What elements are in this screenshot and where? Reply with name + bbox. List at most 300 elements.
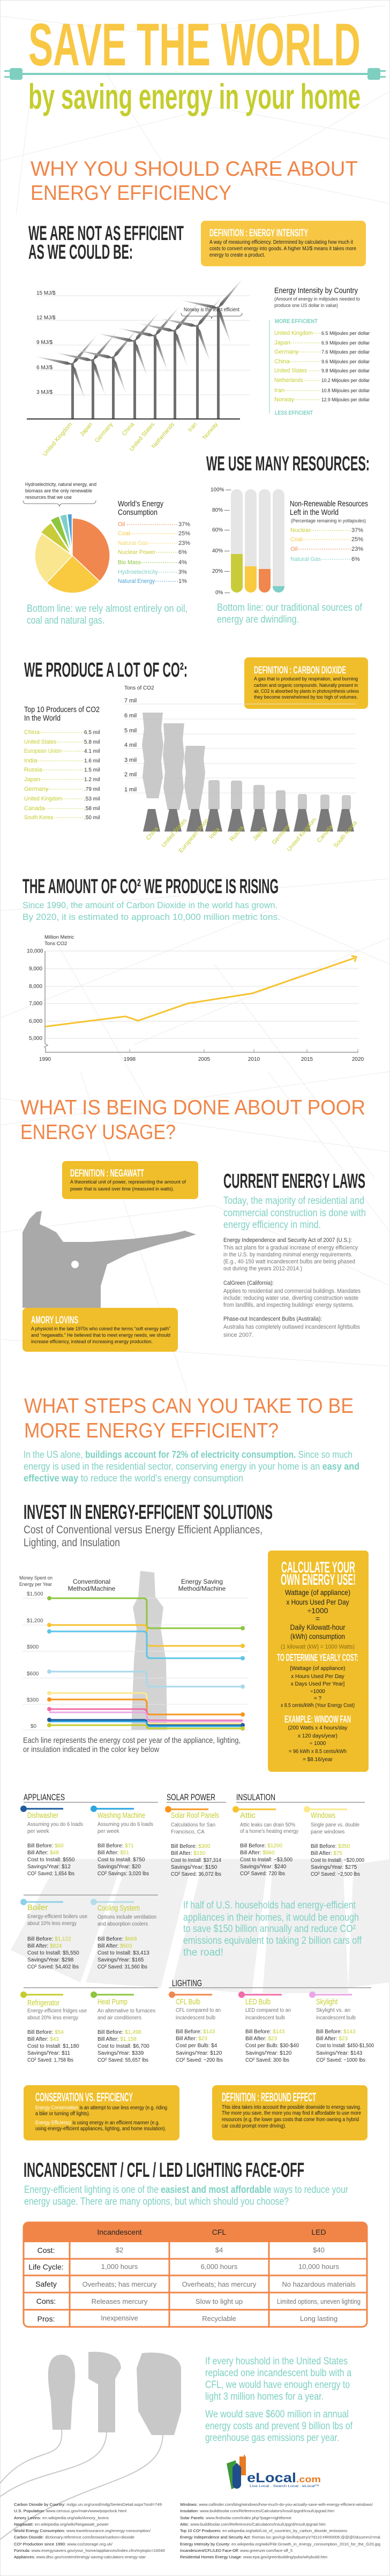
- callout: half of households: to save $150 billion annually and reduce CO²: [183, 1923, 356, 1935]
- heading: not as efficient: WE ARE NOT AS EFFICIENT: [28, 222, 184, 245]
- table: lighting comparison: $40: [313, 2246, 325, 2254]
- text: energy laws list: [223, 1237, 361, 1338]
- text: energy laws list: since 2007.: [223, 1332, 253, 1338]
- box: conservation vs efficiency: using energy-efficient appliances, lighting, and home insulation).: [35, 2126, 166, 2132]
- text: energy laws list: include: reducing water use, diverting construction waste: [223, 1295, 358, 1301]
- item details: row 3: Bill Before: $54: [27, 2030, 64, 2035]
- box: calculate energy use: [Wattage (of appliance): [290, 1666, 346, 1672]
- callout: half of households: [183, 1900, 362, 1958]
- legend: energy intensity by country: Energy Intensity by Country: [274, 286, 358, 295]
- sources: Appliances: www.dtsc.gov/content/energy-saving-calculators-energy-star: [14, 2556, 146, 2559]
- box: amory lovins: increase efficiency, instead of increasing energy production.: [31, 1339, 153, 1345]
- legend: non-renewable: 37%: [351, 527, 363, 534]
- legend: world energy consumption: 37%: [178, 521, 190, 528]
- section heading: what steps: [24, 1395, 354, 1442]
- legend: energy intensity by country: [269, 286, 370, 416]
- item details: row 1: Savings/Year: $275: [311, 1864, 357, 1870]
- chart: wind turbines energy intensity: [27, 278, 250, 458]
- callout: half of households: If half of U.S. households had energy-efficient: [183, 1900, 356, 1911]
- definition box: carbon dioxide: [244, 657, 368, 709]
- box: conservation vs efficiency: Energy Efficiency is using energy in an efficient manner (e.g.: [35, 2120, 160, 2126]
- callout: norway least efficient: [181, 307, 242, 319]
- list: top 10 producers: 5.8 mil: [84, 739, 100, 745]
- table: lighting comparison: 6,000 hours: [201, 2263, 238, 2271]
- item details: row 1: Cost to Install: ~$3,500: [240, 1857, 292, 1863]
- legend: world energy consumption: 3%: [178, 569, 187, 575]
- item details: row 3: Energy-efficient fridges use: [27, 2008, 87, 2014]
- box: amory lovins: A physicist in the late 1970s who coined the terms “soft energy path”: [31, 1326, 170, 1332]
- item details: row 1: per week: [98, 1829, 120, 1834]
- text: cfl replacement: We would save $600 million in annual: [205, 2409, 349, 2420]
- item details: row 2 boiler cooling: and absorption coolers: [98, 1921, 148, 1927]
- list: top 10 producers: .50 mil: [84, 815, 100, 821]
- sources: Top 10 CO² Producers: en.wikipedia.org/wiki/List_of_countries_by_carbon_dioxide_emissions: [180, 2529, 348, 2533]
- item details: row 1: Calculations for San: [171, 1822, 215, 1828]
- text: energy laws list: Energy Independence and Security Act of 2007 (U.S.):: [223, 1237, 352, 1244]
- chart: smokestacks co2: 6 mil: [124, 713, 137, 719]
- box: calculate energy use: [268, 1551, 369, 1772]
- list: top 10 producers: United States: [24, 739, 56, 745]
- line chart: co2 1990-2020: 5,000: [29, 1036, 42, 1042]
- item details: row 3: Skylight vs. an: [316, 2008, 350, 2013]
- legend: energy intensity by country: 6.5 Miljoules per dollar: [321, 331, 370, 336]
- item details: row 1: Bill After: $51: [98, 1850, 129, 1856]
- definition box: carbon dioxide: they become overwhelmed by too high of volumes.: [254, 694, 358, 700]
- item details: row 1: pane windows: [311, 1829, 344, 1835]
- legend: energy intensity by country: Germany: [274, 349, 299, 355]
- chart: wind turbines energy intensity: Japan: [79, 421, 94, 438]
- pie chart: world energy consumption: [35, 514, 110, 593]
- chart: smokestacks co2: Canada: [316, 823, 334, 844]
- table: lighting comparison: 10,000 hours: [298, 2263, 339, 2271]
- item details: row 3: Bill Before: $143: [176, 2029, 215, 2035]
- sources: Insulation: www.builditsolar.com/References/Calculators/InsulUpgrd/InsulUpgrad.htm: [180, 2510, 334, 2513]
- chart: smokestacks co2: 1 mil: [124, 787, 137, 793]
- chart: money spent lines: [19, 1571, 249, 1731]
- text: cfl replacement: If every houshold in the United States: [205, 2356, 348, 2367]
- chart: wind turbines energy intensity: Iran: [187, 421, 198, 433]
- chart: smokestacks co2: China: [145, 825, 160, 842]
- list: top 10 producers: .79 mil: [84, 787, 100, 792]
- item details: row 1: Savings/Year: $12: [27, 1864, 71, 1870]
- definition box: negawatt: [62, 1161, 198, 1199]
- item details: row 3: incandescent bulb: [176, 2015, 215, 2021]
- text: buildings 72%: [24, 1449, 359, 1484]
- bottom line text right: Bottom line: our traditional sources of: [217, 602, 363, 613]
- definition box: negawatt: A theoretical unit of power, representing the amount of: [70, 1179, 186, 1185]
- box: rebound effect: resources (e.g. the lower gas costs that come from owning a hybrid: [222, 2117, 359, 2123]
- table: lighting comparison: Pros:: [38, 2315, 55, 2323]
- table: lighting comparison: Releases mercury: [92, 2297, 148, 2305]
- item details: row 1: CO² Saved: 720 lbs: [240, 1871, 285, 1877]
- bar chart: non-renewable resources: 100% —: [211, 487, 231, 493]
- box: calculate energy use: x Hours Used Per Day: [291, 1674, 344, 1680]
- text: cfl replacement: energy costs and prevent 9 billion lbs of: [205, 2421, 353, 2432]
- definition box: negawatt: power that is saved over time (measured in watts).: [70, 1186, 174, 1192]
- item details: row 1: Bill Before: $1200: [240, 1843, 282, 1849]
- item details: row 3: Bill After: $23: [316, 2036, 348, 2042]
- chart: money spent lines: Method/Machine: [68, 1585, 116, 1592]
- item details: row 2 boiler cooling: Cost to Install: $3,413: [98, 1950, 149, 1956]
- item details: row 1: Bill Before: $300: [171, 1844, 211, 1849]
- definition box: energy intensity: costs to convert energy into goods. A higher MJ/$ means it takes more: [209, 246, 356, 252]
- sources: Energy Intensity by County: en.wikipedia.org/wiki/File:Growth_in_energy_consumption_2010_for_the_G20.jpg: [180, 2543, 380, 2547]
- box: calculate energy use: = 96 kWh x 8.5 cents/kWh: [289, 1749, 347, 1755]
- legend: world energy consumption: 23%: [178, 540, 190, 546]
- item details: row 1: per week: [27, 1829, 50, 1834]
- legend: energy intensity by country: LESS EFFICIENT: [275, 410, 313, 416]
- box: amory lovins: and “negawatts.” He believed that to meet energy needs, we should: [31, 1332, 170, 1338]
- item details: row 2 boiler cooling: CO² Saved: 54,402 lbs: [27, 1964, 79, 1970]
- list: top 10 producers: Germany: [24, 786, 49, 792]
- text: energy laws list: from landfills, and inspecting buildings’ energy systems.: [223, 1302, 354, 1308]
- list: top 10 producers: China: [24, 729, 40, 736]
- chart: wind turbines energy intensity: China: [121, 421, 136, 437]
- table: lighting comparison: 1,000 hours: [101, 2263, 138, 2271]
- legend: world energy consumption: Natural Energy: [118, 578, 155, 585]
- table: lighting comparison: Life Cycle:: [28, 2263, 64, 2271]
- box: calculate energy use: ÷1000: [308, 1606, 328, 1615]
- chart: smokestacks co2: Tons of CO2: [124, 685, 154, 691]
- text: energy laws intro: [223, 1195, 366, 1231]
- box: rebound effect: This idea takes into account the possible downside to energy saving.: [222, 2105, 361, 2110]
- box: amory lovins: [22, 1308, 178, 1352]
- item details: row 1: Attic leaks can drain 50%: [240, 1822, 295, 1828]
- table: lighting comparison: $2: [116, 2246, 123, 2254]
- legend: world energy consumption: World’s Energy: [118, 499, 163, 508]
- section headers: appliances solar insulation: LIGHTING: [172, 1978, 202, 1988]
- text: cfl replacement: CFL, we would have enough energy to: [205, 2379, 350, 2391]
- sources: Residential Homes Energy Usage: www.epa.gov/greenbuilding/pubs/whybuild.htm: [180, 2556, 327, 2559]
- item details: row 1: Dishwasher: [27, 1811, 58, 1820]
- box: calculate energy use: =: [316, 1614, 320, 1623]
- legend: energy intensity by country: produce one US dollar in value): [274, 303, 338, 309]
- list: top 10 producers: Canada: [24, 805, 45, 812]
- sources: U.S. Population: www.census.gov/main/www/popclock.html: [14, 2510, 126, 2513]
- icon: plug cord: [4, 68, 386, 80]
- chart: money spent lines: Money Spent on: [19, 1575, 52, 1581]
- item details: row 1: Bill After: $150: [171, 1851, 206, 1856]
- item details: row 3: Savings/Year: $120: [245, 2050, 292, 2056]
- legend: energy intensity by country: 9.6 Miljoules per dollar: [321, 359, 370, 365]
- legend: world energy consumption: 1%: [178, 578, 187, 585]
- subtitle: cost comparison: Cost of Conventional versus Energy Efficient Appliances,: [24, 1524, 262, 1536]
- line chart: co2 1990-2020: Tons CO2: [44, 941, 67, 947]
- chart: wind turbines energy intensity: 6 MJ/$: [36, 365, 52, 371]
- chart: smokestacks co2: Germany: [271, 823, 291, 846]
- item details: row 1: Cost to Install: $550: [27, 1857, 75, 1863]
- chart: smokestacks co2: [124, 685, 359, 854]
- chart: wind turbines energy intensity: 3 MJ/$: [36, 390, 52, 395]
- item details: row 3: Bill After: $43: [27, 2036, 59, 2042]
- chart: smokestacks co2: 4 mil: [124, 742, 137, 748]
- item details: row 2 boiler cooling: Savings/Year: $298: [27, 1957, 74, 1963]
- item details: row 3: Savings/Year: $11: [27, 2050, 70, 2056]
- item details: row 3: LED Bulb: [245, 1997, 271, 2006]
- bar chart: non-renewable resources: [211, 487, 284, 596]
- heading: not as efficient: [28, 222, 184, 264]
- definition box: carbon dioxide: carbon and organic compounds. Naturally present in: [254, 683, 358, 688]
- table: lighting comparison: Long lasting: [300, 2315, 338, 2323]
- bar chart: non-renewable resources: 60% —: [212, 527, 230, 533]
- item details: row 1: Solar Roof Panels: [171, 1811, 219, 1820]
- item details: row 3: Cost to Install: $6,700: [98, 2043, 149, 2049]
- bottom line text left: [27, 603, 188, 626]
- legend: energy intensity by country: (Amount of energy in milijoules needed to: [274, 296, 360, 302]
- legend: world energy consumption: [118, 499, 190, 585]
- item details: row 2 boiler cooling: Cooling System: [98, 1904, 140, 1913]
- chart: money spent lines: $1,200: [27, 1618, 43, 1624]
- item details: row 2 boiler cooling: Bill After: $503: [98, 1943, 132, 1949]
- box: calculate energy use: x 120 days/year): [298, 1733, 338, 1739]
- legend: world energy consumption: Natural Gas: [118, 540, 148, 546]
- line chart: co2 1990-2020: 6,000: [29, 1019, 42, 1024]
- sources: Amory Lovins: en.wikipedia.org/wiki/Amory_lovins: [14, 2517, 109, 2520]
- item details: row 1: Washing Machine: [98, 1811, 145, 1820]
- section heading: what steps: WHAT STEPS CAN YOU TAKE TO BE: [24, 1395, 354, 1418]
- item details: row 1: Cost to Install: $37,314: [171, 1858, 221, 1863]
- text: energy laws list: Phase-out Incandescent Bulbs (Australia):: [223, 1316, 322, 1322]
- text: energy laws list: (E.g., 40-150 watt incandescent bulbs are being phased: [223, 1259, 355, 1265]
- table: lighting comparison: Limited options, uneven lighting: [277, 2297, 361, 2305]
- box: rebound effect: [212, 2085, 368, 2140]
- legend: non-renewable: Nuclear: [290, 527, 311, 534]
- text: energy laws list: Applies to residential and commercial buildings. Mandates: [223, 1288, 361, 1294]
- definition box: energy intensity: A way of measuring efficiency. Determined by calculating how much it: [209, 239, 353, 245]
- chart: smokestacks co2: United States: [160, 817, 188, 849]
- legend: non-renewable: Non-Renewable Resources: [290, 499, 368, 508]
- sources: CO² Production since 1990: www.co2storage.org.uk/: [14, 2543, 112, 2547]
- legend: energy intensity by country: Iran: [274, 387, 284, 394]
- item details: row 1: Savings/Year: $150: [171, 1864, 218, 1870]
- item details: row 3: CFL Bulb: [176, 1997, 200, 2006]
- box: calculate energy use: = $8.16/year: [303, 1757, 333, 1763]
- box: calculate energy use: ÷1000: [310, 1689, 325, 1695]
- box: calculate energy use: x Days Used Per Year]: [291, 1681, 345, 1687]
- chart: smokestacks co2: United Kingdom: [286, 817, 318, 853]
- item details: row 2 boiler cooling: Boiler: [27, 1903, 48, 1912]
- heading: not as efficient: AS WE COULD BE:: [28, 241, 133, 264]
- sources: Energy Independence and Security Act: thomas.loc.gov/cgi-bin/bdquery/z?d110:HR00006:@@@D&summ2=m&: [180, 2536, 380, 2540]
- item details: row 1: Attic: [240, 1811, 256, 1820]
- text: energy laws list: in the U.S. by mandating minimal energy requirements.: [223, 1252, 352, 1258]
- chart: smokestacks co2: 2 mil: [124, 772, 137, 778]
- sources: Negawatt: en.wikipedia.org/wiki/Negawatt_power: [14, 2523, 109, 2527]
- bar chart: non-renewable resources: 80% —: [212, 507, 230, 513]
- list: top 10 producers: India: [24, 758, 38, 764]
- section headers: appliances solar insulation: SOLAR POWER: [167, 1792, 215, 1802]
- text: cfl replacement: [205, 2356, 353, 2444]
- item details: row 3: Bill Before: $143: [245, 2029, 285, 2035]
- item details: row 1: Francisco, CA: [171, 1829, 205, 1835]
- chart: money spent lines: Method/Machine: [178, 1585, 226, 1592]
- chart: wind turbines energy intensity: Germany: [94, 421, 115, 444]
- background: solar panels: [11, 1859, 390, 1993]
- section heading: why care: ENERGY EFFICIENCY: [31, 182, 231, 205]
- chart: smokestacks co2: 3 mil: [124, 757, 137, 763]
- sources: Carbon Dioxide by Country: mdgs.un.org/unsd/mdg/SeriesDetail.aspx?srid=749: [14, 2503, 162, 2507]
- box: conservation vs efficiency: [24, 2085, 179, 2140]
- item details: row 1: CO² Savings: 3,020 lbs: [98, 1871, 149, 1877]
- chart: wind turbines energy intensity: 15 MJ/$: [36, 290, 56, 296]
- legend: energy intensity by country: 7.6 Miljoules per dollar: [321, 349, 370, 355]
- chart: smokestacks co2: 5 mil: [124, 728, 137, 734]
- box: rebound effect: The more you save, the more you may find it affordable to use more: [222, 2110, 361, 2116]
- item details: row 3: Savings/Year: $339: [98, 2050, 144, 2056]
- text: each line represents: [23, 1736, 241, 1754]
- bottom line text right: energy are dwindling.: [217, 614, 299, 625]
- table: lighting comparison: Safety: [35, 2280, 57, 2288]
- chart: money spent lines: $300: [27, 1697, 39, 1703]
- item details: row 3: Cost per Bulb: $30-$40: [245, 2043, 299, 2049]
- line chart: co2 1990-2020: 1998: [124, 1057, 136, 1062]
- item details: row 3: LED compared to an: [245, 2008, 291, 2013]
- legend: world energy consumption: Oil: [118, 521, 125, 528]
- item details: row 3: Bill Before: $1,498: [98, 2030, 141, 2035]
- chart: money spent lines: $0: [31, 1724, 37, 1729]
- list: top 10 producers: South Korea: [24, 814, 54, 821]
- list: top 10 producers: 1.2 mil: [84, 777, 100, 783]
- legend: world energy consumption: 4%: [178, 559, 187, 566]
- legend: world energy consumption: Coal: [118, 530, 130, 537]
- text: buildings 72%: In the US alone, buildings account for 72% of electricity consumption. Since so much: [24, 1449, 352, 1460]
- item details: row 3: CO² Saved: 55,657 lbs: [98, 2057, 148, 2063]
- legend: energy intensity by country: United Kingdom: [274, 330, 313, 336]
- item icons: color keys: [21, 1807, 352, 1997]
- item details: row 1: CO² Saved: 1,654 lbs: [27, 1871, 74, 1877]
- legend: energy intensity by country: 6.9 Miljoules per dollar: [321, 340, 370, 346]
- sources: Formula: www.energysavers.gov/your_home/appliances/index.cfm/mytopic=10040: [14, 2549, 165, 2553]
- list: top 10 producers: Japan: [24, 776, 40, 783]
- bar chart: non-renewable resources: 20% —: [212, 568, 230, 574]
- item details: row 1: Assuming you do 6 loads: [27, 1822, 83, 1828]
- item details: row 1: Bill After: $48: [27, 1850, 59, 1856]
- item details: row 1: Cost to Install: ~$20,000: [311, 1858, 364, 1863]
- box: calculate energy use: = ?: [314, 1696, 322, 1702]
- subtitle: cost comparison: Lighting, and Insulation: [24, 1537, 120, 1549]
- callout: renewable: Hydroelectricity, natural energy, and: [25, 482, 96, 488]
- item details: row 2 boiler cooling: Energy-efficient boilers use: [27, 1914, 87, 1920]
- illustration: light bulbs: [0, 2352, 181, 2540]
- bar chart: non-renewable resources: 40% —: [212, 548, 230, 554]
- list: top 10 producers: Top 10 Producers of CO2: [24, 705, 100, 714]
- legend: non-renewable: [290, 499, 368, 563]
- list: top 10 producers: [24, 705, 100, 821]
- box: calculate energy use: (kWh) consumption: [290, 1632, 345, 1641]
- box: calculate energy use: Daily Kilowatt-hour: [290, 1623, 346, 1631]
- item details: row 3: Bill After: $1,158: [98, 2036, 137, 2042]
- bar chart: non-renewable resources: 0% —: [215, 590, 230, 596]
- list: top 10 producers: .53 mil: [84, 796, 100, 802]
- table: lighting comparison: Overheats; has mercury: [182, 2280, 257, 2288]
- table: lighting comparison: Incandescent: [97, 2228, 142, 2236]
- item details: row 3: incandescent bulb: [245, 2015, 285, 2021]
- table: lighting comparison: Inexpensive: [101, 2314, 138, 2322]
- line chart: co2 1990-2020: 9,000: [29, 966, 42, 972]
- chart: smokestacks co2: Japan: [252, 826, 267, 842]
- item details: row 1: Savings/Year: $20: [98, 1864, 141, 1870]
- line chart: co2 1990-2020: 7,000: [29, 1001, 42, 1007]
- item details: row 2 boiler cooling: about 10% less energy: [27, 1921, 77, 1927]
- line chart: co2 1990-2020: 10,000: [27, 948, 43, 954]
- chart: wind turbines energy intensity: United States: [129, 421, 156, 453]
- callout: half of households: the road!: [183, 1947, 223, 1958]
- text: buildings 72%: effective way to reduce the world's energy consumption: [24, 1473, 243, 1484]
- table: lighting comparison: LED: [311, 2228, 326, 2236]
- item details: row 1: Bill Before: $60: [27, 1843, 64, 1849]
- item details: row 3: An alternative to furnaces: [98, 2008, 155, 2014]
- item details: row 1: Savings/Year: $240: [240, 1864, 287, 1870]
- text: cfl replacement: light 3 million homes for a year.: [205, 2391, 324, 2402]
- legend: energy intensity by country: 10.8 Miljoules per dollar: [321, 388, 370, 394]
- line chart: co2 1990-2020: 2020: [352, 1057, 364, 1062]
- legend: non-renewable: Natural Gas: [290, 556, 321, 563]
- legend: world energy consumption: Nuclear Power: [118, 549, 155, 556]
- item details: row 3: Cost to Install: $1,180: [27, 2043, 79, 2049]
- text: cfl replacement: greenhouse gas emissions per year.: [205, 2432, 339, 2444]
- item details: row 1: Cost to Install: $750: [98, 1857, 145, 1863]
- text: co2 growth: Since 1990, the amount of Carbon Dioxide in the world has grown.: [22, 900, 278, 910]
- item details: row 3: CO² Saved: 1,758 lbs: [27, 2057, 73, 2063]
- definition box: carbon dioxide: A gas that is produced by respiration, and burning: [254, 676, 358, 682]
- text: energy laws list: Australia has completely outlawed incandescent lightbulbs: [223, 1324, 360, 1330]
- legend: non-renewable: 25%: [351, 536, 363, 543]
- subtitle: cost comparison: [24, 1524, 262, 1549]
- item details: row 2 boiler cooling: Cost to Install: $5,550: [27, 1950, 79, 1956]
- box: calculate energy use: ÷ 1000: [310, 1741, 326, 1747]
- chart: smokestacks co2: Russia: [229, 825, 245, 843]
- section heading: what is being done: WHAT IS BEING DONE ABOUT POOR: [20, 1096, 365, 1119]
- item details: row 2 boiler cooling: Bill After: $824: [27, 1943, 62, 1949]
- chart: money spent lines: $1,500: [27, 1591, 43, 1597]
- sources: World Energy Consumption: www.travelinsurance.org/energy-consumption/: [14, 2529, 151, 2533]
- box: calculate energy use: x 8.5 cents/kWh (Your Energy Cost): [281, 1703, 355, 1709]
- box: calculate energy use: (1 kilowatt (kW) = 1000 Watts): [281, 1644, 355, 1650]
- logo: elocal: Live Local · Search Local · eLocal™: [250, 2484, 319, 2488]
- logo: elocal: [227, 2455, 321, 2489]
- item details: row 2 boiler cooling: Bill Before: $668: [98, 1936, 137, 1942]
- legend: energy intensity by country: China: [274, 358, 290, 365]
- item details: row 1: CO² Saved: ~2,500 lbs: [311, 1871, 360, 1877]
- item details: row 1: [27, 1811, 364, 1877]
- legend: world energy consumption: Hydroelectricity: [118, 569, 158, 575]
- item details: row 3: Cost per Bulb: $4: [176, 2043, 218, 2049]
- item details: row 1: Bill After: $960: [240, 1850, 275, 1856]
- item details: row 3: Heat Pump: [98, 1997, 128, 2006]
- chart: wind turbines energy intensity: Netherlands: [151, 421, 176, 450]
- chart: smokestacks co2: European Union: [178, 818, 210, 854]
- text: energy laws list: CalGreen (California):: [223, 1280, 274, 1286]
- table: lighting comparison: Recyclable: [202, 2315, 236, 2323]
- text: buildings 72%: energy is used in the residential sector, conserving energy in your home is an easy and: [24, 1461, 359, 1472]
- line chart: co2 1990-2020: 2015: [301, 1057, 313, 1062]
- table: lighting comparison: No hazardous materials: [282, 2280, 356, 2288]
- item details: row 3: about 20% less energy: [27, 2015, 78, 2021]
- section headers: appliances solar insulation: [24, 1792, 371, 1988]
- list: top 10 producers: 4.1 mil: [84, 748, 100, 754]
- legend: energy intensity by country: MORE EFFICIENT: [275, 318, 318, 325]
- legend: energy intensity by country: Japan: [274, 340, 290, 346]
- legend: energy intensity by country: Netherlands: [274, 377, 303, 384]
- table: lighting comparison: Slow to light up: [196, 2297, 243, 2305]
- legend: energy intensity by country: United States: [274, 368, 307, 374]
- sources: Attic: www.builditsolar.com/References/Calculators/InsulUpgrd/InsulUpgrad.htm: [180, 2523, 326, 2527]
- section headers: appliances solar insulation: INSULATION: [236, 1792, 275, 1802]
- item details: row 3: Bill After: $23: [245, 2036, 277, 2042]
- table: lighting comparison: Cons:: [36, 2297, 56, 2305]
- list: top 10 producers: 1.6 mil: [84, 758, 100, 764]
- line chart: co2 1990-2020: [27, 934, 364, 1062]
